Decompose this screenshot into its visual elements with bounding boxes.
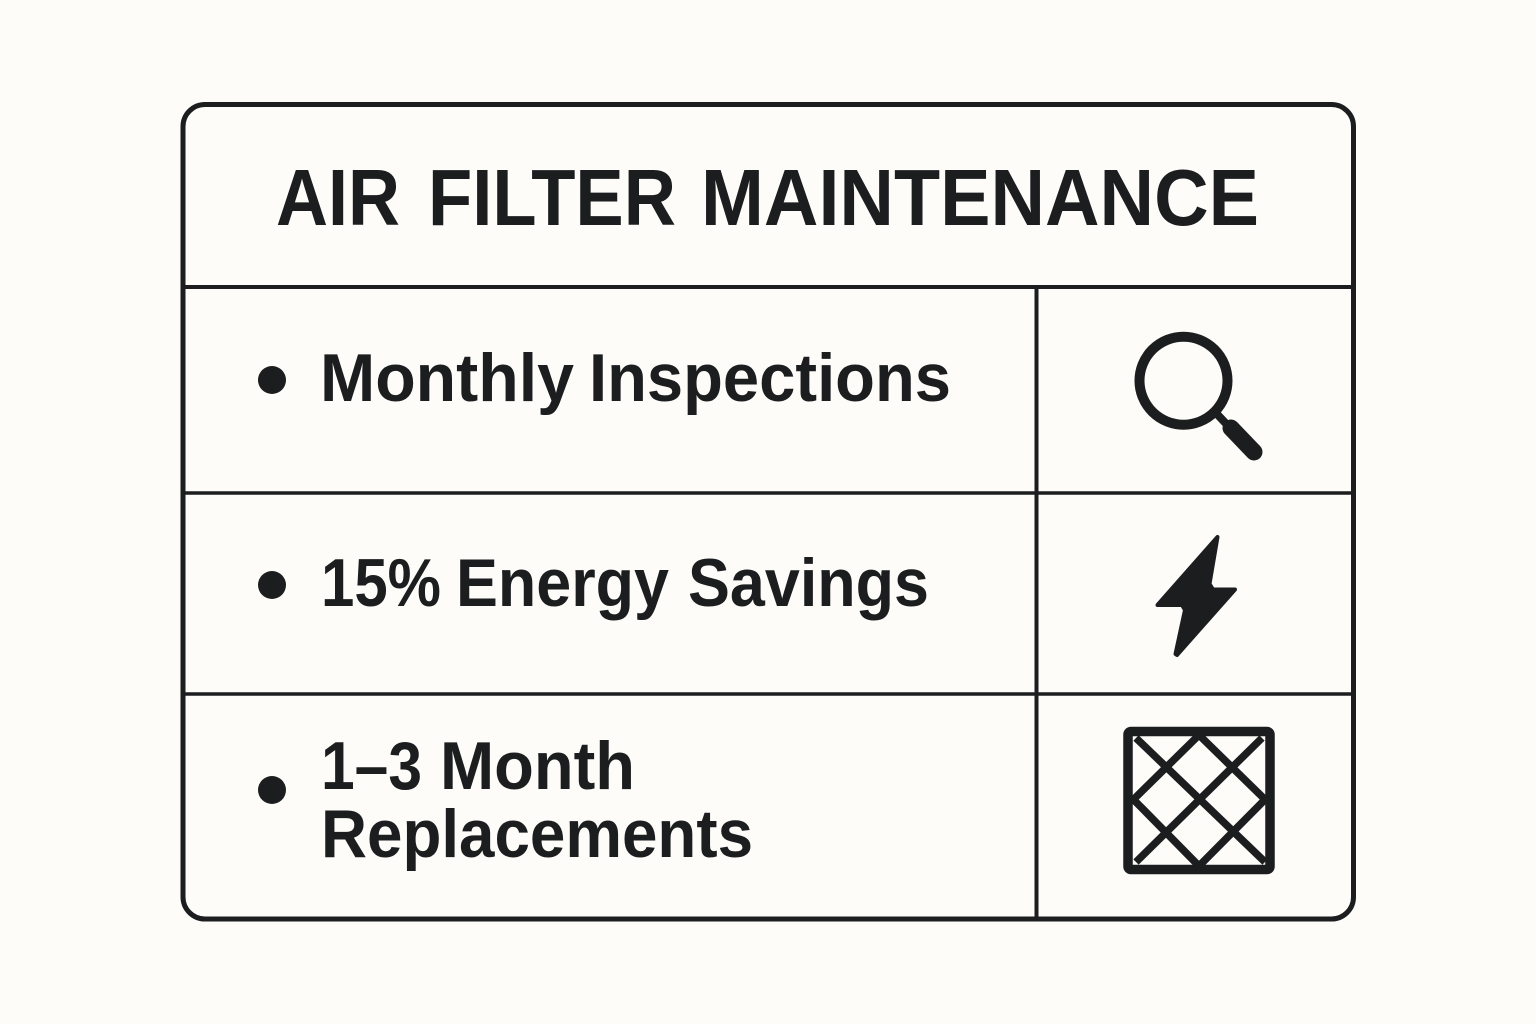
- row: monthly inspections: [258, 340, 951, 416]
- text: energy savings: Savings: [688, 545, 929, 621]
- text: replacements: 1–3: [321, 728, 422, 804]
- text: monthly inspections: Inspections: [589, 340, 951, 416]
- text: replacements: Month: [440, 728, 635, 804]
- icon: magnifying glass: [1140, 337, 1254, 452]
- text: energy savings: 15%: [321, 545, 441, 621]
- title: MAINTENANCE: [701, 153, 1259, 242]
- bullet: energy savings: [258, 571, 286, 599]
- text: replacements: Replacements: [321, 796, 753, 872]
- text: monthly inspections: Monthly: [320, 340, 574, 416]
- panel: maintenance table: [183, 104, 1354, 919]
- icon: lightning bolt: [1158, 537, 1235, 655]
- bullet: monthly inspections: [258, 366, 286, 394]
- title: FILTER: [428, 153, 676, 242]
- row: energy savings: [258, 545, 929, 621]
- title: AIR: [276, 153, 400, 242]
- bullet: replacements: [258, 776, 286, 804]
- text: energy savings: Energy: [456, 545, 669, 621]
- row: replacements: [258, 728, 753, 872]
- text: replacements: [321, 728, 753, 872]
- icon: air filter: [1128, 732, 1270, 870]
